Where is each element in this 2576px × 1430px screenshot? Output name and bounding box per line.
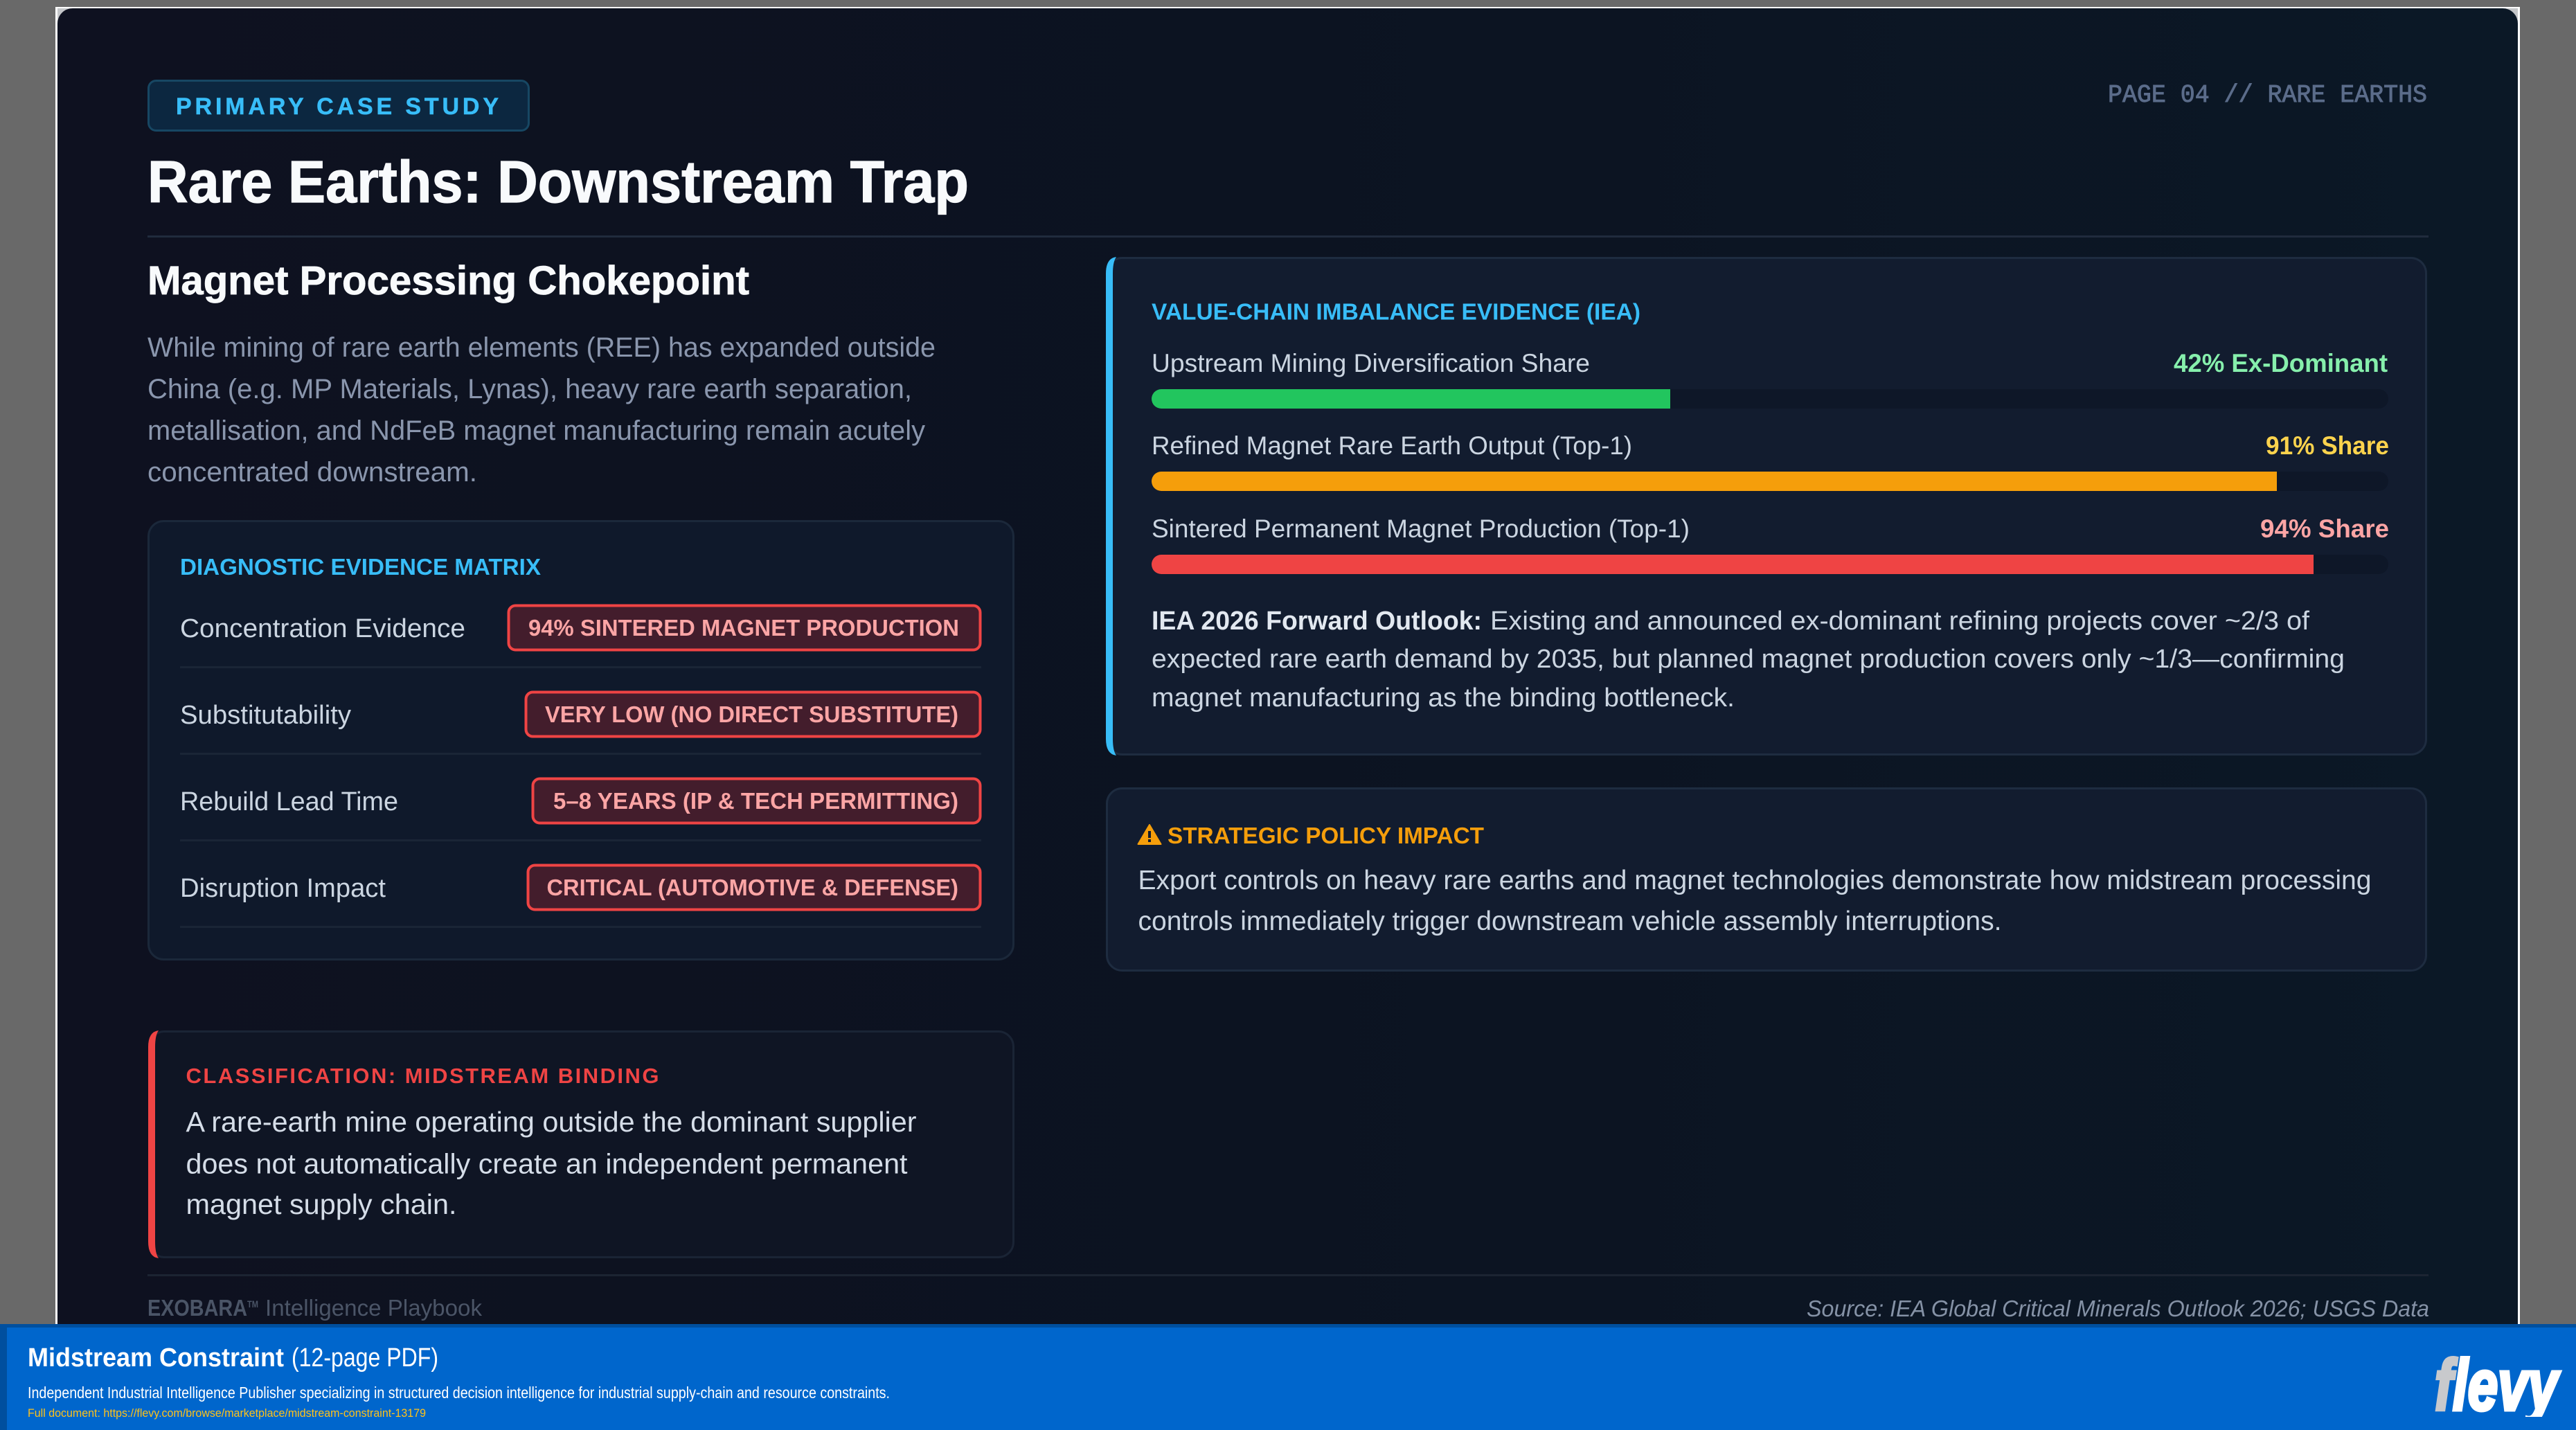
badge: primary case study bbox=[148, 80, 529, 130]
intro paragraph: metallisation, and NdFeB magnet manufacturing remain acutely bbox=[147, 415, 925, 446]
icon: warning triangle bbox=[1138, 825, 1161, 844]
section heading: magnet processing chokepoint: Magnet Processing Chokepoint bbox=[147, 258, 749, 303]
bar: refined magnet rare earth output: Refined Magnet Rare Earth Output (Top-1) bbox=[1152, 431, 1632, 460]
forward outlook paragraph: magnet manufacturing as the binding bottleneck. bbox=[1152, 683, 1735, 713]
footer: brand: Intelligence Playbook bbox=[265, 1295, 482, 1321]
intro paragraph: While mining of rare earth elements (REE) has expanded outside bbox=[147, 332, 936, 363]
footer: brand: EXOBARA bbox=[147, 1295, 247, 1321]
banner title bbox=[28, 1343, 438, 1373]
bar: sintered permanent magnet production bbox=[1152, 515, 2389, 574]
policy body text: controls immediately trigger downstream vehicle assembly interruptions. bbox=[1138, 906, 2001, 936]
bottom banner bbox=[0, 1324, 2576, 1430]
policy body text: Export controls on heavy rare earths and magnet technologies demonstrate how midstream processing bbox=[1138, 866, 2371, 895]
classification statement: magnet supply chain. bbox=[186, 1188, 457, 1220]
classification accent bar bbox=[148, 1030, 159, 1258]
matrix heading: DIAGNOSTIC EVIDENCE MATRIX bbox=[180, 554, 541, 580]
banner title: (12-page PDF) bbox=[292, 1343, 438, 1373]
intro paragraph: concentrated downstream. bbox=[147, 457, 477, 488]
row: concentration evidence: Concentration Evidence bbox=[180, 614, 465, 643]
row: disruption impact: Disruption Impact bbox=[180, 874, 386, 903]
bar: refined magnet rare earth output: 91% Share bbox=[2266, 431, 2389, 460]
panel: classification callout bbox=[148, 1030, 1014, 1258]
intro paragraph: China (e.g. MP Materials, Lynas), heavy rare earth separation, bbox=[147, 374, 912, 404]
bar: upstream mining bbox=[1152, 349, 2388, 409]
row: substitutability: Substitutability bbox=[180, 701, 351, 730]
policy heading: STRATEGIC POLICY IMPACT bbox=[1168, 823, 1484, 848]
footer: brand: TM bbox=[247, 1298, 258, 1310]
classification label: CLASSIFICATION: MIDSTREAM BINDING bbox=[186, 1064, 659, 1088]
value-chain heading: VALUE-CHAIN IMBALANCE EVIDENCE (IEA) bbox=[1152, 299, 1640, 324]
panel: strategic policy impact bbox=[1107, 788, 2426, 971]
row: concentration evidence bbox=[180, 605, 981, 650]
banner description: Independent Industrial Intelligence Publisher specializing in structured decision intelligence for industrial supply-chain and resource constraints. bbox=[28, 1384, 890, 1402]
footer: brand bbox=[147, 1295, 482, 1321]
classification statement bbox=[186, 1106, 917, 1220]
intro paragraph bbox=[147, 332, 936, 488]
row: rebuild lead time: 5–8 YEARS (IP & TECH PERMITTING) bbox=[553, 788, 958, 814]
bar: upstream mining: 42% Ex-Dominant bbox=[2174, 349, 2388, 377]
classification statement: does not automatically create an independent permanent bbox=[186, 1148, 908, 1180]
row: substitutability: VERY LOW (NO DIRECT SUBSTITUTE) bbox=[545, 701, 958, 727]
bar: upstream mining: Upstream Mining Diversification Share bbox=[1152, 349, 1590, 377]
bar: refined magnet rare earth output bbox=[1152, 431, 2389, 491]
bar: sintered permanent magnet production: 94% Share bbox=[2260, 515, 2389, 543]
forward outlook paragraph: expected rare earth demand by 2035, but planned magnet production covers only ~1/3—confirming bbox=[1152, 645, 2345, 674]
row: disruption impact bbox=[180, 866, 981, 910]
title: Rare Earths: Downstream Trap bbox=[147, 150, 969, 215]
forward outlook paragraph: Existing and announced ex-dominant refining projects cover ~2/3 of bbox=[1490, 607, 2309, 636]
value-chain accent bar bbox=[1106, 257, 1116, 756]
page label: PAGE 04 // RARE EARTHS bbox=[2108, 81, 2427, 109]
panel: value-chain imbalance evidence bbox=[1106, 257, 2426, 756]
row: rebuild lead time bbox=[180, 778, 981, 823]
panel: diagnostic evidence matrix bbox=[148, 521, 1014, 960]
row: disruption impact: CRITICAL (AUTOMOTIVE & DEFENSE) bbox=[547, 875, 958, 900]
policy body text bbox=[1138, 866, 2371, 936]
row: substitutability bbox=[180, 692, 981, 737]
badge: primary case study: PRIMARY CASE STUDY bbox=[176, 93, 499, 120]
forward outlook paragraph bbox=[1152, 607, 2345, 713]
banner document link: Full document: https://flevy.com/browse/marketplace/midstream-constraint-13179 bbox=[28, 1406, 426, 1420]
row: concentration evidence: 94% SINTERED MAGNET PRODUCTION bbox=[528, 615, 959, 641]
forward outlook paragraph: IEA 2026 Forward Outlook: bbox=[1152, 607, 1482, 636]
bar: sintered permanent magnet production: Sintered Permanent Magnet Production (Top-1) bbox=[1152, 515, 1690, 543]
classification statement: A rare-earth mine operating outside the dominant supplier bbox=[186, 1106, 917, 1138]
row: rebuild lead time: Rebuild Lead Time bbox=[180, 787, 398, 816]
banner title: Midstream Constraint bbox=[28, 1343, 284, 1373]
footer: source: Source: IEA Global Critical Minerals Outlook 2026; USGS Data bbox=[1807, 1296, 2429, 1321]
